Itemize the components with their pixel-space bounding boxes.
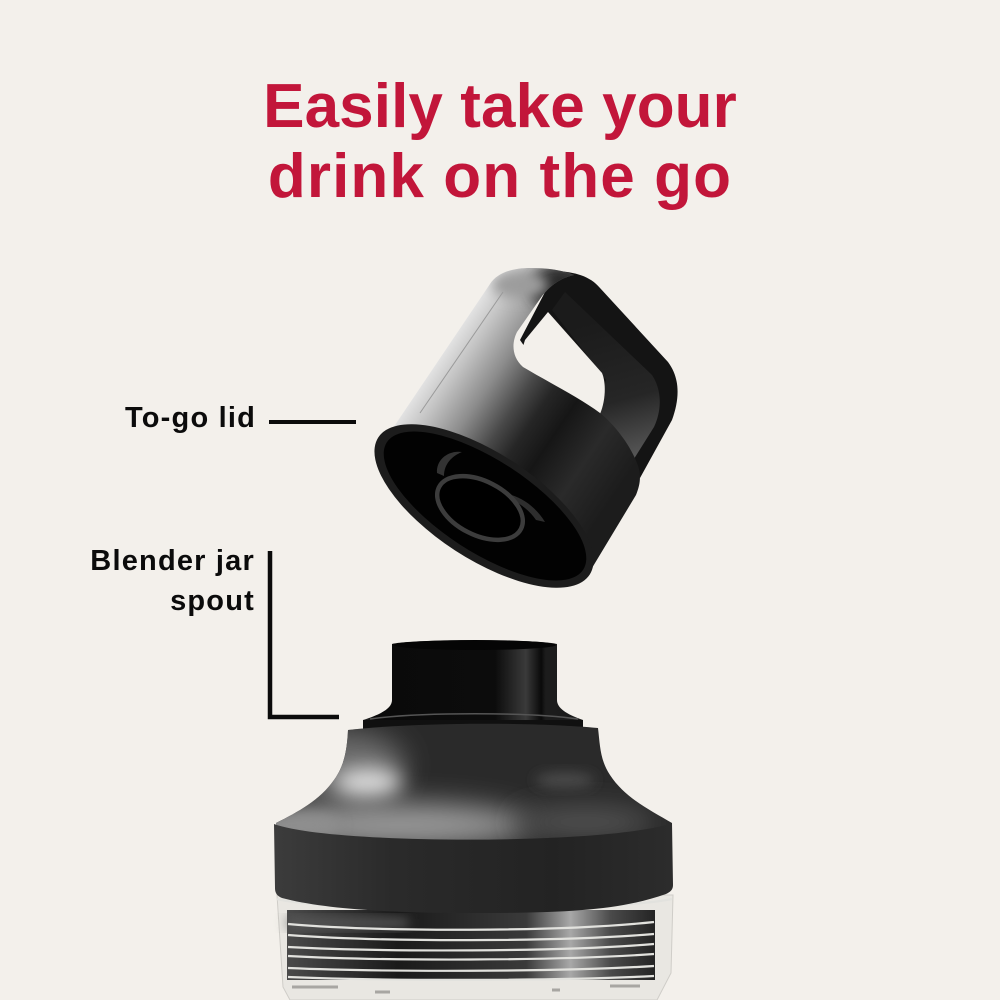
lid underside <box>362 404 608 608</box>
spout opening <box>394 640 556 650</box>
label: To-go lid: To-go lid <box>125 402 256 434</box>
shoulder <box>276 724 672 840</box>
label: Blender jar spout: Blender jar <box>90 545 255 577</box>
jar base marks <box>292 986 640 992</box>
lid inner ring <box>427 463 533 553</box>
lid handle inner panel <box>552 292 660 462</box>
glass jar <box>277 895 673 1000</box>
title: drink on the go <box>268 142 732 211</box>
lid right tab <box>500 494 545 522</box>
label: Blender jar spout <box>90 545 255 617</box>
jar grey reflection <box>288 918 408 928</box>
spout neck <box>363 640 583 729</box>
blender jar <box>260 640 680 1000</box>
jar dark threads <box>287 910 655 980</box>
lid body <box>380 268 640 581</box>
label: Blender jar spout: spout <box>170 585 255 617</box>
jar thread lines <box>277 899 672 980</box>
lid upper tab <box>437 452 462 476</box>
title <box>263 72 737 211</box>
lid top shading <box>488 268 574 310</box>
lid band <box>274 823 673 913</box>
lid rim <box>349 393 619 619</box>
lid handle opening <box>521 312 605 414</box>
to-go lid <box>374 268 678 588</box>
spout flange <box>363 720 583 730</box>
title: Easily take your <box>263 72 737 141</box>
leader line: To-go lid <box>269 420 356 424</box>
lid handle <box>520 271 678 478</box>
leader line: Blender jar spout <box>270 551 339 717</box>
